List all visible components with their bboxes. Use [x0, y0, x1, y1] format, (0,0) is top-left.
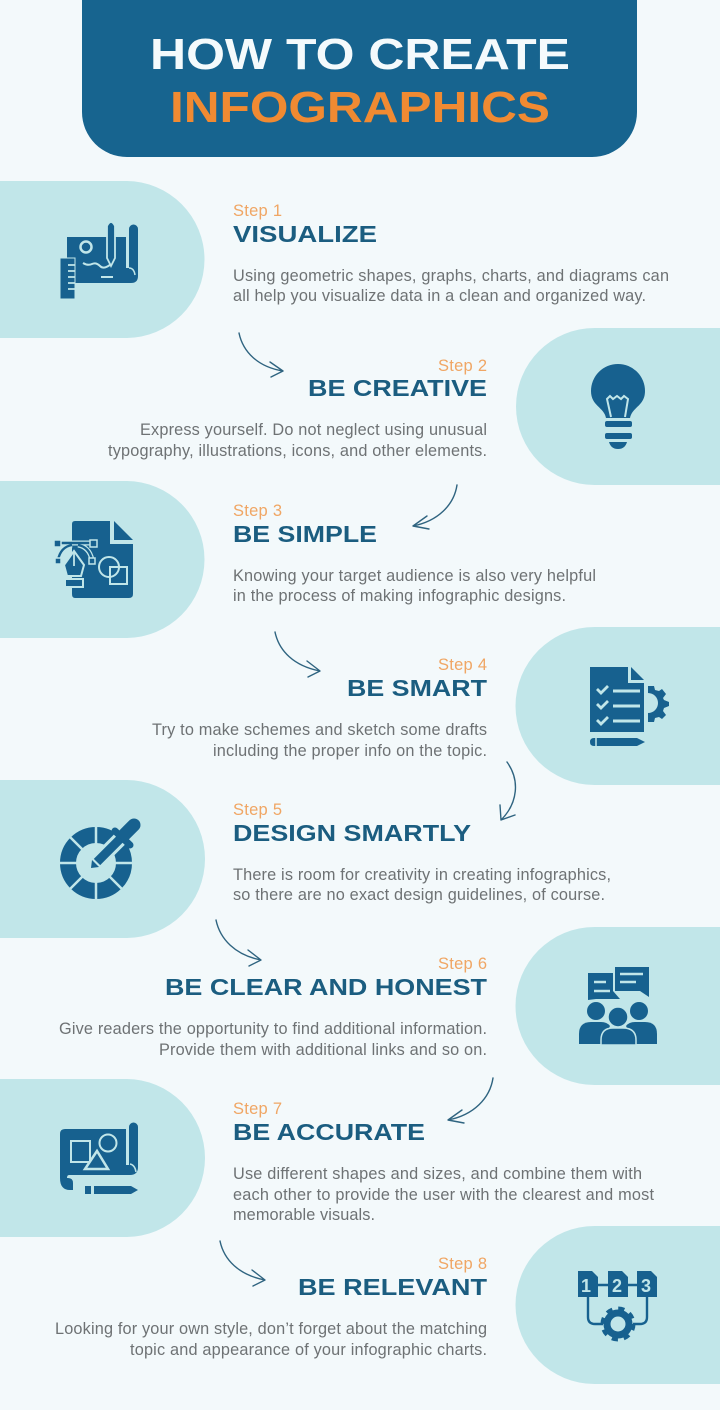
step description: in the process of making infographic designs. [233, 587, 566, 605]
step heading: BE ACCURATE [233, 1119, 425, 1145]
step description: Looking for your own style, don’t forget about the matching [55, 1320, 487, 1338]
step description: Give readers the opportunity to find additional information. [59, 1020, 487, 1038]
step description: each other to provide the user with the clearest and most [233, 1186, 654, 1204]
step heading: BE CLEAR AND HONEST [165, 974, 488, 1000]
step label: Step 1 [233, 202, 282, 220]
icon: color wheel with eyedropper [58, 825, 134, 901]
step description: Use different shapes and sizes, and combine them with [233, 1165, 642, 1183]
step description [59, 1020, 487, 1059]
panel: step 2 be creative [108, 328, 720, 485]
icon: numbered process with gear: 2 [612, 1276, 622, 1296]
step label: Step 3 [233, 502, 282, 520]
icon: checklist with gear [590, 667, 669, 746]
step description: including the proper info on the topic. [213, 742, 487, 760]
icon: blueprint and ruler [60, 222, 138, 299]
header banner [82, 0, 637, 157]
step description: Provide them with additional links and so on. [159, 1041, 487, 1059]
panel: step 3 be simple [0, 481, 596, 638]
panel: step 8 be relevant [55, 1226, 720, 1384]
step label: Step 2 [438, 357, 487, 375]
step description [108, 421, 487, 460]
step heading: BE SMART [347, 675, 488, 701]
arrow: step 7 to step 8 [220, 1241, 265, 1286]
panel: step 7 be accurate [0, 1079, 654, 1237]
step heading: BE CREATIVE [308, 375, 487, 401]
step description [233, 567, 596, 605]
arrow: step 4 to step 5 [500, 762, 515, 820]
step description [233, 866, 611, 904]
step description: memorable visuals. [233, 1206, 375, 1224]
step heading: DESIGN SMARTLY [233, 820, 471, 846]
arrow: step 3 to step 4 [275, 632, 320, 677]
step description: so there are no exact design guidelines, of course. [233, 886, 605, 904]
icon: light bulb [591, 364, 645, 449]
step heading: BE RELEVANT [298, 1274, 488, 1300]
arrow: step 5 to step 6 [216, 920, 261, 966]
step description: typography, illustrations, icons, and other elements. [108, 442, 487, 460]
step description: all help you visualize data in a clean and organized way. [233, 287, 646, 305]
step description: Try to make schemes and sketch some drafts [152, 721, 487, 739]
step description [55, 1320, 487, 1359]
icon: numbered process with gear [578, 1271, 657, 1339]
icon: audience with speech bubbles [579, 967, 657, 1045]
step description [233, 267, 669, 305]
step label: Step 4 [438, 656, 487, 674]
icon: numbered process with gear: 3 [641, 1276, 651, 1296]
step description [152, 721, 487, 760]
step label: Step 8 [438, 1255, 487, 1273]
step label: Step 6 [438, 955, 487, 973]
step label: Step 7 [233, 1100, 282, 1118]
title line 1: HOW TO CREATE [150, 30, 570, 79]
arrow: step 1 to step 2 [239, 333, 283, 377]
step description: There is room for creativity in creating infographics, [233, 866, 611, 884]
title line 2: INFOGRAPHICS [170, 83, 550, 132]
step description: topic and appearance of your infographic charts. [130, 1341, 487, 1359]
panel: step 4 be smart [152, 627, 720, 785]
panel: step 6 be clear and honest [59, 927, 720, 1085]
step heading: VISUALIZE [233, 221, 377, 247]
step label: Step 5 [233, 801, 282, 819]
arrow: step 6 to step 7 [448, 1078, 493, 1123]
arrow: step 2 to step 3 [413, 485, 457, 529]
step heading: BE SIMPLE [233, 521, 377, 547]
step description: Express yourself. Do not neglect using unusual [140, 421, 487, 439]
step description: Knowing your target audience is also very helpful [233, 567, 596, 585]
icon: numbered process with gear: 1 [581, 1276, 591, 1296]
icon: blueprint with shapes and pencil [60, 1122, 138, 1194]
step description: Using geometric shapes, graphs, charts, and diagrams can [233, 267, 669, 285]
panel: step 5 design smartly [0, 780, 611, 938]
step description [233, 1165, 654, 1224]
panel: step 1 visualize [0, 181, 669, 338]
icon: document with pen tool [54, 521, 133, 598]
